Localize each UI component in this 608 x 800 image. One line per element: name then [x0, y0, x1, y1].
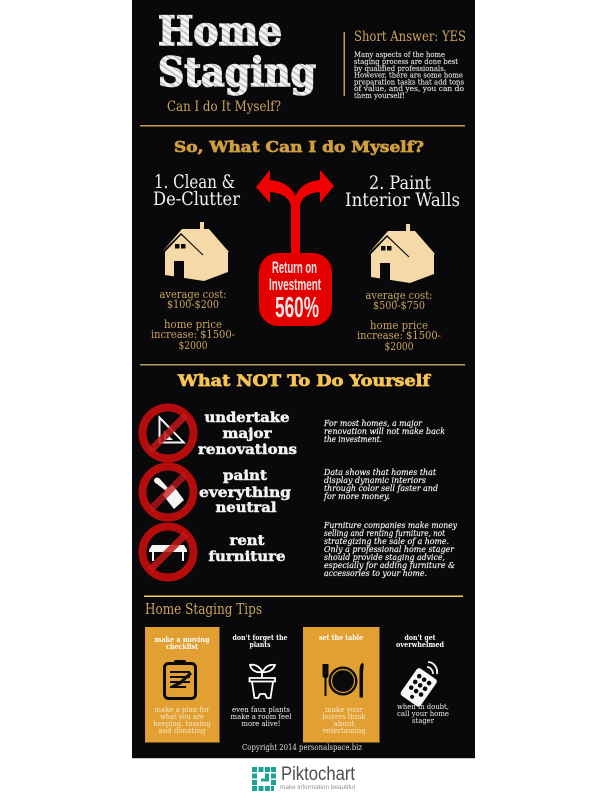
- callout: return on investment: Investment: [269, 275, 321, 294]
- description: especially for adding furniture &: [324, 561, 455, 570]
- description: [323, 419, 445, 444]
- tip card: plants: make a room feel: [230, 712, 292, 721]
- cost and price text: [151, 288, 235, 352]
- label: furniture: [208, 549, 286, 565]
- label: [208, 533, 286, 565]
- label: [198, 410, 297, 458]
- description: the investment.: [324, 435, 382, 444]
- piktochart logo: [252, 764, 356, 791]
- title: [158, 8, 316, 96]
- icon: house: [368, 224, 435, 283]
- icon: no furniture bench: [142, 526, 194, 578]
- tip card: plants: plants: [250, 640, 271, 649]
- option 2: paint interior walls: [345, 172, 460, 353]
- cost and price text: home price: [164, 318, 222, 331]
- short answer block: by qualified professionals.: [354, 65, 446, 73]
- label: renovations: [198, 442, 297, 458]
- description: selling and renting furniture, not: [324, 529, 446, 538]
- short answer block: staging process are done best: [354, 58, 458, 66]
- cost and price text: average cost:: [366, 289, 432, 302]
- description: accessories to your home.: [324, 569, 427, 578]
- tip card: don't get overwhelmed: call your home: [397, 709, 450, 718]
- tip card: don't get overwhelmed: overwhelmed: [396, 640, 444, 649]
- label: undertake: [204, 410, 290, 426]
- short answer block: Short Answer: YES: [354, 29, 466, 45]
- tip card: moving checklist: keeping, tossing: [154, 719, 211, 728]
- callout: return on investment: [259, 253, 332, 326]
- label: everything: [199, 485, 291, 501]
- cost and price text: $500-$750: [373, 299, 425, 312]
- option 2: paint interior walls: Interior Walls: [345, 189, 460, 211]
- label: paint: [223, 468, 268, 484]
- short answer block: Many aspects of the home: [354, 51, 445, 59]
- description: renovation will not make back: [324, 427, 445, 436]
- item: undertake major renovations: [142, 408, 445, 458]
- tip card: set the table: buyers think: [322, 712, 366, 721]
- tip card: plants: more alive!: [242, 719, 280, 728]
- tip card: moving checklist: make a plan for: [154, 705, 210, 714]
- short answer block: However, there are some home: [354, 72, 463, 80]
- tip card: set the table: [303, 627, 380, 742]
- description: For most homes, a major: [323, 419, 423, 428]
- tip card: moving checklist: what you are: [160, 712, 204, 721]
- icon: no renovations set square: [142, 408, 194, 458]
- cost and price text: $2000: [178, 339, 208, 352]
- title: Home: [158, 8, 282, 55]
- cost and price text: home price: [370, 319, 428, 332]
- piktochart logo: make information beautiful: [280, 785, 355, 791]
- cost and price text: increase: $1500-: [357, 329, 441, 342]
- short answer block: [344, 29, 466, 100]
- heading: so what can I do myself: So, What Can I do Myself?: [174, 138, 424, 156]
- cost and price text: $100-$200: [167, 298, 219, 311]
- tip card: moving checklist: make a moving: [154, 635, 210, 644]
- tip card: plants: [230, 633, 292, 728]
- tip card: don't get overwhelmed: when in doubt,: [397, 702, 449, 711]
- short answer block: of value, and yes, you can do: [354, 85, 464, 93]
- tip card: set the table: make your: [325, 705, 363, 714]
- heading: what not to do yourself: What NOT To Do Yourself: [177, 371, 432, 390]
- description: for more money.: [323, 492, 390, 501]
- tip card: plants: don't forget the: [232, 633, 288, 642]
- icon: potted plant: [250, 665, 275, 698]
- description: Data shows that homes that: [323, 468, 437, 477]
- panel: black infographic background: [132, 0, 475, 758]
- tip card: don't get overwhelmed: don't get: [404, 633, 436, 642]
- label: [199, 468, 291, 516]
- description: strategizing the sale of a home.: [324, 537, 449, 546]
- short answer block: them yourself!: [354, 92, 405, 100]
- cost and price text: [357, 289, 441, 353]
- tip card: moving checklist: and donating: [158, 726, 206, 735]
- tip card: plants: even faux plants: [232, 705, 290, 714]
- cost and price text: $2000: [384, 340, 414, 353]
- tip card: moving checklist: [145, 627, 220, 742]
- label: major: [222, 426, 272, 442]
- icon: house: [162, 222, 229, 281]
- icon: plate with fork and knife: [322, 664, 363, 697]
- option 1: clean and de-clutter: De-Clutter: [153, 188, 241, 210]
- option 1: clean and de-clutter: 1. Clean &: [154, 171, 235, 193]
- description: should provide staging advice,: [324, 553, 445, 562]
- description: [323, 468, 438, 501]
- short answer block: preparation tasks that add tons: [354, 78, 464, 86]
- cost and price text: average cost:: [160, 288, 226, 301]
- icon: logo grid: [252, 767, 276, 791]
- label: rent: [230, 533, 265, 549]
- icon: remote control: [399, 662, 438, 708]
- label: neutral: [216, 500, 276, 516]
- subtitle: Can I do It Myself?: [167, 99, 281, 115]
- tip card: don't get overwhelmed: [396, 633, 450, 725]
- tip card: set the table: set the table: [319, 633, 363, 642]
- description: [323, 521, 457, 578]
- callout: return on investment: 560%: [275, 292, 319, 324]
- cost and price text: increase: $1500-: [151, 328, 235, 341]
- copyright: Copyright 2014 personalspace.biz: [242, 743, 362, 752]
- option 2: paint interior walls: 2. Paint: [369, 172, 431, 194]
- description: Only a professional home stager: [324, 545, 455, 554]
- icon: no paint brush: [142, 466, 194, 518]
- item: rent furniture: [142, 521, 457, 578]
- title: Staging: [158, 49, 316, 96]
- tip card: don't get overwhelmed: stager: [412, 716, 434, 725]
- icon: red split arrow: [256, 170, 334, 254]
- tip card: set the table: entertaining: [322, 726, 366, 735]
- option 1: clean and de-clutter: [151, 171, 241, 352]
- callout: return on investment: Return on: [272, 258, 317, 277]
- description: through color sell faster and: [324, 484, 438, 493]
- tip card: moving checklist: checklist: [166, 642, 199, 651]
- piktochart logo: Piktochart: [281, 764, 356, 785]
- description: display dynamic interiors: [324, 476, 426, 485]
- tip card: set the table: about: [334, 719, 354, 728]
- item: paint everything neutral: [142, 466, 438, 518]
- heading: home staging tips: Home Staging Tips: [145, 600, 262, 618]
- icon: clipboard: [164, 660, 196, 698]
- description: Furniture companies make money: [323, 521, 457, 530]
